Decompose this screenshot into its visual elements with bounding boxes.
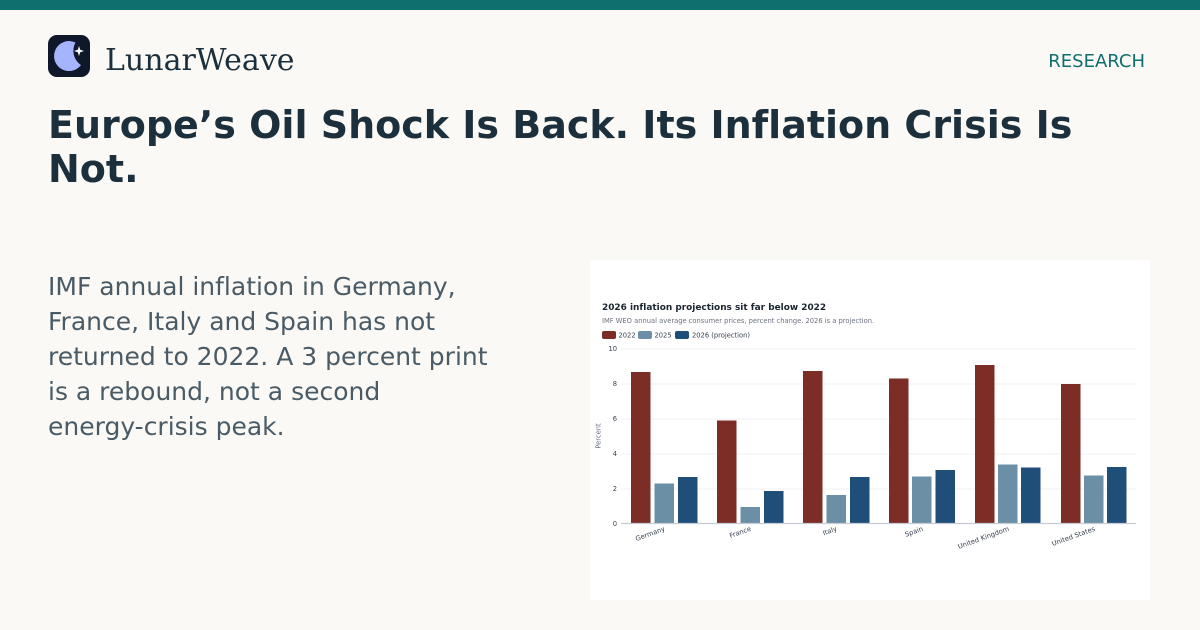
y axis title: Percent	[594, 423, 602, 449]
chart subtitle: IMF WEO annual average consumer prices, percent change. 2026 is a projection.	[602, 317, 874, 325]
summary text: returned to 2022. A 3 percent print	[48, 342, 488, 371]
x axis labels: France	[728, 525, 752, 540]
top accent bar	[0, 0, 1200, 10]
y axis labels: 4	[613, 450, 617, 458]
chart title: 2026 inflation projections sit far below 2022	[602, 303, 826, 313]
title: Europe’s Oil Shock Is Back. Its Inflation Crisis Is Not.	[48, 103, 1072, 191]
x axis labels: Spain	[904, 525, 924, 539]
panel: chart	[590, 260, 1150, 600]
bars: 2026 projection	[678, 467, 1126, 524]
x axis labels: United States	[1051, 525, 1097, 548]
legend: 2026 (projection)	[692, 332, 750, 340]
legend: 2022	[618, 332, 636, 340]
y axis labels: 8	[613, 380, 617, 388]
summary text: energy-crisis peak.	[48, 412, 285, 441]
summary text: is a rebound, not a second	[48, 377, 380, 406]
brand name: LunarWeave	[105, 43, 295, 78]
y axis labels: 2	[613, 485, 617, 493]
y axis labels: 6	[613, 415, 617, 423]
summary text: France, Italy and Spain has not	[48, 307, 435, 336]
summary text	[48, 272, 488, 441]
y axis labels: 10	[608, 345, 617, 353]
legend	[602, 331, 750, 340]
x axis labels: Italy	[822, 525, 838, 537]
y axis labels	[608, 345, 617, 528]
bars: 2025	[654, 464, 1104, 524]
x axis labels	[634, 525, 1097, 551]
x axis labels: Germany	[634, 525, 666, 543]
legend: 2025	[654, 332, 672, 340]
summary text: IMF annual inflation in Germany,	[48, 272, 456, 301]
x axis labels: United Kingdom	[957, 525, 1010, 551]
section label: RESEARCH	[1048, 51, 1145, 72]
y axis labels: 0	[613, 520, 617, 528]
icon: moon logo	[48, 35, 90, 77]
bars: 2022	[631, 365, 1080, 524]
